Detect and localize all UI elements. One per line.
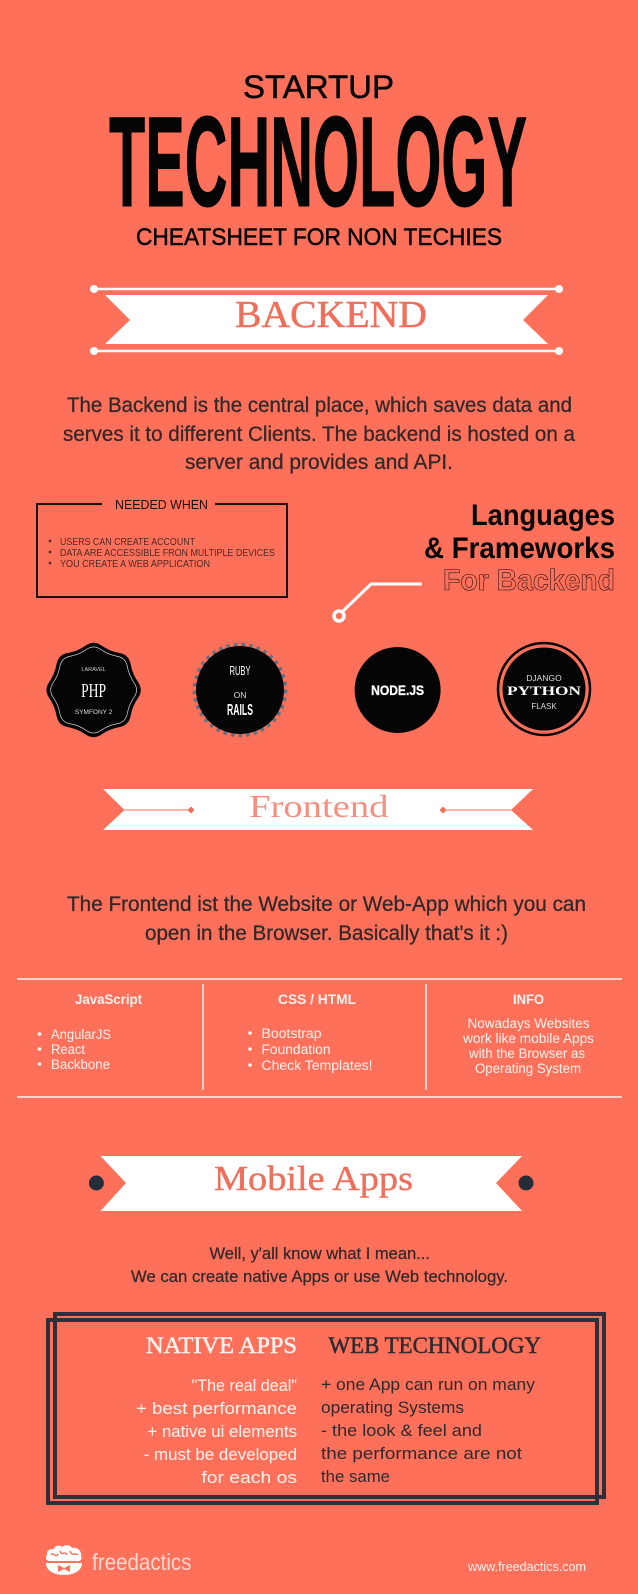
text: backend description: The Backend is the central place, which saves data and: [67, 394, 572, 417]
text: website: www.freedactics.com: [467, 1559, 586, 1574]
heading: languages and frameworks: [424, 499, 615, 597]
banner: backend: BACKEND: [235, 294, 427, 336]
text: frontend description: The Frontend ist the Website or Web-App which you can: [67, 893, 586, 916]
column: css html: [248, 992, 372, 1073]
banner: mobile apps: Mobile Apps: [214, 1159, 413, 1198]
column: javascript: [38, 992, 142, 1072]
list: needed when: DATA ARE ACCESSIBLE FRON MULTIPLE DEVICES: [60, 547, 275, 559]
column: native apps: + native ui elements: [148, 1423, 297, 1441]
icon: freedactics logo: [46, 1545, 82, 1575]
column: web technology: operating Systems: [321, 1399, 464, 1417]
column: web technology: - the look & feel and: [321, 1422, 482, 1440]
column: native apps: for each os: [201, 1469, 297, 1487]
column: javascript: React: [51, 1042, 85, 1057]
column: native apps: + best performance: [136, 1400, 297, 1418]
column: native apps: [136, 1333, 297, 1487]
banner: backend: [90, 285, 563, 355]
heading: languages and frameworks: Languages: [471, 499, 615, 532]
column: css html: Bootstrap: [262, 1026, 322, 1041]
banner: mobile apps: [89, 1156, 534, 1211]
badge: python: PYTHON: [507, 683, 582, 698]
list: needed when: [49, 536, 275, 570]
column: info: work like mobile Apps: [462, 1031, 594, 1046]
text: mobile apps description: We can create native Apps or use Web technology.: [131, 1268, 508, 1286]
column: css html: Foundation: [262, 1042, 330, 1057]
column: css html: CSS / HTML: [278, 992, 356, 1007]
banner: frontend: [103, 788, 533, 830]
table: frontend technologies: [17, 979, 622, 1097]
column: info: [462, 992, 594, 1076]
badge: python: DJANGO: [526, 673, 562, 683]
text: backend description: [63, 394, 575, 474]
text: frontend description: [67, 893, 586, 945]
badge: node.js: NODE.JS: [371, 682, 424, 698]
column: native apps: NATIVE APPS: [146, 1333, 297, 1358]
panel: native apps vs web technology: [48, 1314, 604, 1503]
column: native apps: "The real deal": [192, 1377, 297, 1395]
text: backend description: serves it to different Clients. The backend is hosted on a: [63, 423, 575, 446]
badge: python: FLASK: [531, 702, 557, 711]
column: css html: Check Templates!: [262, 1058, 372, 1073]
panel: needed when: [37, 498, 287, 597]
badge: php: [46, 643, 141, 737]
text: frontend description: open in the Browser. Basically that's it :): [145, 922, 508, 945]
badge: node.js: [355, 647, 441, 733]
column: web technology: [321, 1333, 541, 1486]
title: STARTUP: [243, 69, 394, 105]
badge: ruby on rails: RUBY: [230, 663, 251, 678]
badge: php: PHP: [81, 680, 106, 702]
column: info: Operating System: [475, 1061, 581, 1076]
badge: php: LARAVEL: [81, 667, 106, 673]
text: mobile apps description: [131, 1245, 508, 1286]
title: [109, 69, 527, 251]
badge: php: SYMFONY 2: [75, 709, 113, 716]
heading: languages and frameworks: & Frameworks: [424, 532, 615, 565]
badge: ruby on rails: [194, 644, 286, 736]
column: web technology: + one App can run on many: [321, 1376, 536, 1394]
title: CHEATSHEET FOR NON TECHIES: [136, 224, 502, 251]
heading: languages and frameworks: For Backend: [443, 564, 615, 597]
column: javascript: JavaScript: [75, 992, 142, 1007]
text: mobile apps description: Well, y'all know what I mean...: [210, 1245, 430, 1263]
arrow: connector to badges: [334, 584, 422, 621]
heading: needed when: NEEDED WHEN: [115, 498, 208, 512]
column: web technology: the performance are not: [321, 1445, 522, 1463]
column: web technology: the same: [321, 1468, 390, 1486]
list: needed when: USERS CAN CREATE ACCOUNT: [60, 536, 195, 548]
text: freedactics brand: freedactics: [92, 1549, 192, 1575]
column: native apps: - must be developed: [144, 1446, 297, 1464]
column: javascript: Backbone: [51, 1057, 110, 1072]
column: info: with the Browser as: [468, 1046, 585, 1061]
text: backend description: server and provides and API.: [185, 451, 453, 474]
column: javascript: AngularJS: [51, 1027, 111, 1042]
column: web technology: WEB TECHNOLOGY: [328, 1333, 541, 1358]
banner: frontend: Frontend: [249, 788, 388, 824]
column: info: INFO: [513, 992, 544, 1007]
badge: python: [498, 643, 590, 735]
badge: ruby on rails: RAILS: [227, 702, 253, 719]
column: info: Nowadays Websites: [468, 1016, 590, 1031]
badge: ruby on rails: ON: [234, 690, 246, 700]
list: needed when: YOU CREATE A WEB APPLICATION: [60, 558, 210, 570]
